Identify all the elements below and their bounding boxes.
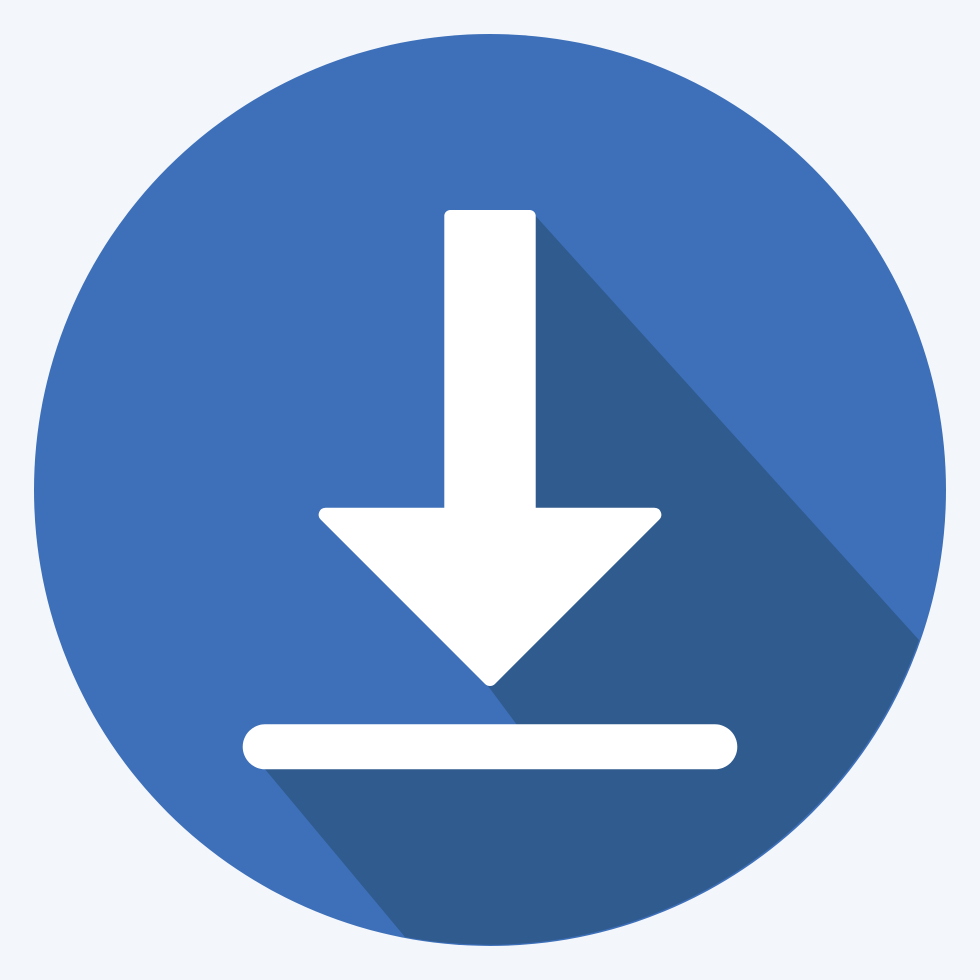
arrow xyxy=(319,210,661,686)
long shadow xyxy=(264,216,919,945)
baseline bar xyxy=(243,724,737,769)
